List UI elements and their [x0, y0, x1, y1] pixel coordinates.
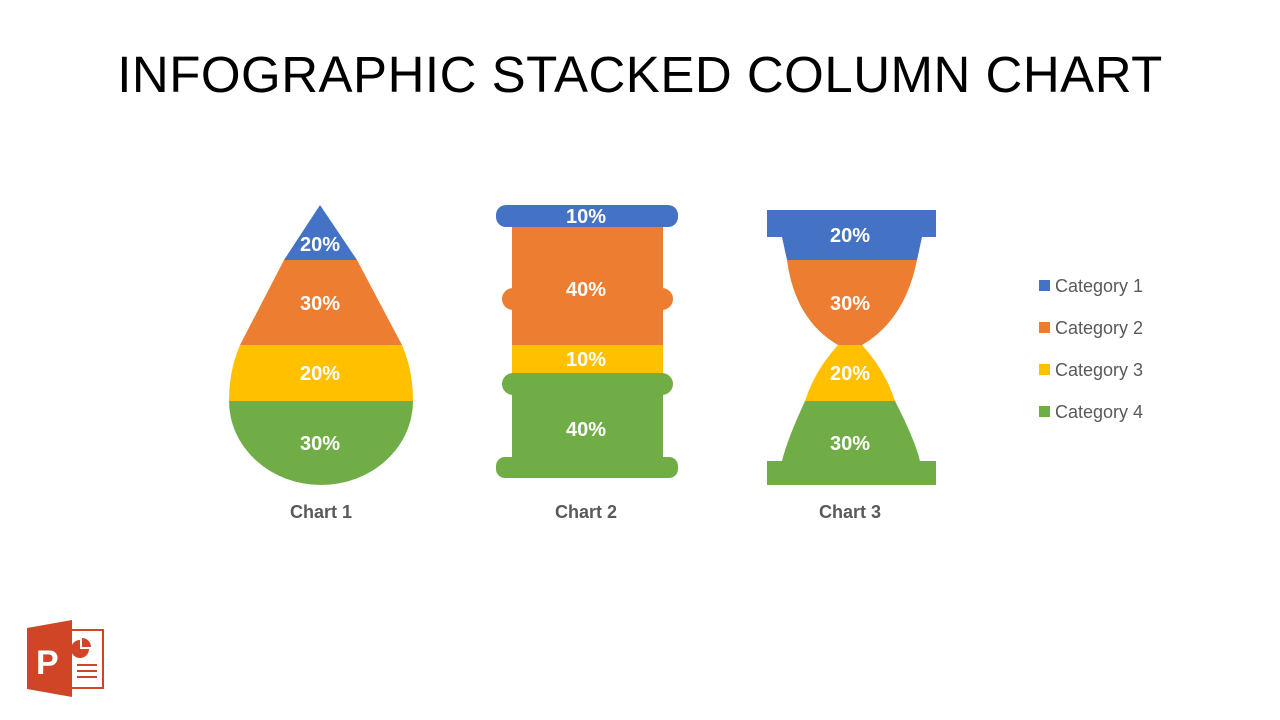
legend: Category 4 — [1055, 402, 1143, 422]
chart 3: hourglass: 30% — [830, 293, 870, 315]
chart 3: hourglass — [767, 210, 936, 522]
icon: powerpoint logo: P — [36, 644, 59, 682]
chart 2: barrel: 40% — [566, 279, 606, 301]
legend: Category 1 — [1055, 276, 1143, 296]
chart 2: barrel: 40% — [566, 419, 606, 441]
chart 1: drop: 30% — [300, 433, 340, 455]
legend — [1039, 276, 1143, 422]
chart 3: hourglass: 30% — [830, 433, 870, 455]
chart 3: hourglass: 20% — [830, 363, 870, 385]
chart 1: drop: Chart 1 — [290, 502, 352, 522]
chart 1: drop: 20% — [300, 363, 340, 385]
title: INFOGRAPHIC STACKED COLUMN CHART — [117, 46, 1163, 103]
chart 3: hourglass: 20% — [830, 225, 870, 247]
chart 1: drop — [229, 205, 413, 522]
icon: powerpoint logo — [27, 620, 103, 697]
chart 1: drop: 20% — [300, 234, 340, 256]
chart 1: drop: 30% — [300, 293, 340, 315]
chart 2: barrel: Chart 2 — [555, 502, 617, 522]
chart 2: barrel: 10% — [566, 206, 606, 228]
legend: Category 3 — [1055, 360, 1143, 380]
chart 3: hourglass: Chart 3 — [819, 502, 881, 522]
chart 2: barrel — [496, 205, 678, 522]
chart 2: barrel: 10% — [566, 349, 606, 371]
legend: Category 2 — [1055, 318, 1143, 338]
